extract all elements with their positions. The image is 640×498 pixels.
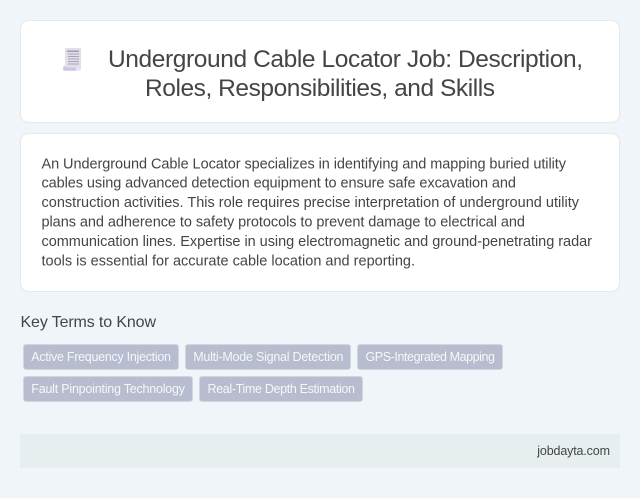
panel: title card (20, 20, 620, 122)
tag: active frequency injection: Active Frequency Injection (31, 350, 171, 364)
tag: fault pinpointing technology (24, 376, 192, 402)
tag: real-time depth estimation (200, 376, 362, 402)
title: Roles, Responsibilities, and Skills (145, 75, 495, 102)
tag: multi-mode signal detection: Multi-Mode Signal Detection (193, 350, 344, 364)
tag: real-time depth estimation: Real-Time Depth Estimation (208, 382, 355, 396)
icon: scroll document (63, 48, 81, 71)
text block: job description (42, 156, 592, 269)
text block: job description: plans and adherence to safety protocols to prevent damage to electrical and (42, 214, 525, 230)
text block: job description: communication lines. Expertise in using electromagnetic and ground-penetrating radar (42, 234, 592, 250)
tag: active frequency injection (24, 344, 178, 370)
text block: job description: construction activities. This role requires precise interpretation of underground utility (42, 195, 580, 211)
tag: multi-mode signal detection (186, 344, 350, 370)
text block: job description: tools is essential for accurate cable location and reporting. (42, 253, 415, 269)
text block: job description: An Underground Cable Locator specializes in identifying and mapping buried utility (42, 156, 567, 172)
tag: fault pinpointing technology: Fault Pinpointing Technology (31, 382, 186, 396)
tag: gps-integrated mapping (358, 344, 502, 370)
panel: description card (20, 134, 620, 292)
title: Underground Cable Locator Job: Description, (108, 46, 583, 73)
footer bar: jobdayta.com (536, 444, 610, 458)
text block: job description: cables using advanced detection equipment to ensure safe excavation and (42, 176, 516, 192)
footer bar (20, 434, 620, 468)
tag: gps-integrated mapping: GPS-Integrated Mapping (366, 350, 495, 364)
title (108, 46, 583, 102)
heading: key terms: Key Terms to Know (20, 314, 156, 331)
